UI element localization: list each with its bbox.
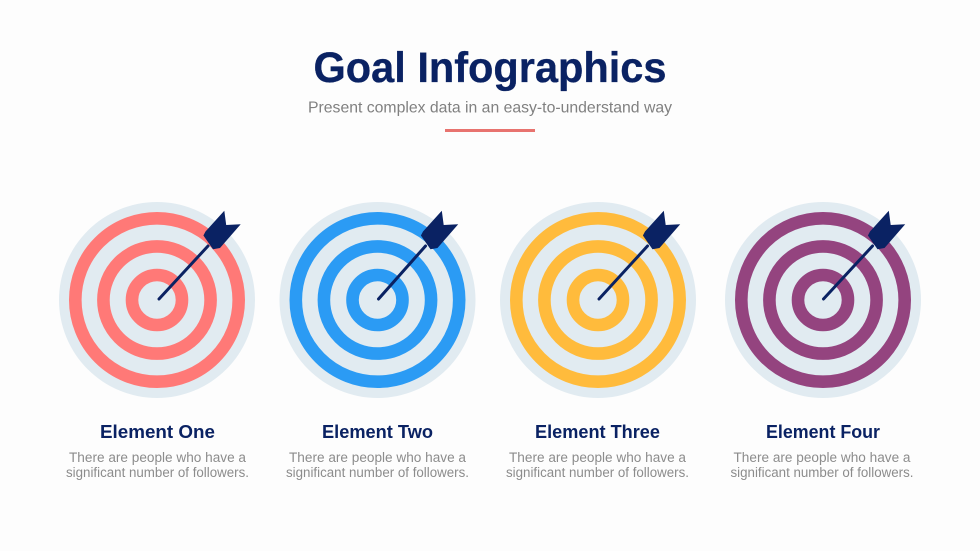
title underline accent <box>445 129 535 132</box>
description: element one <box>66 450 249 480</box>
description: element two: significant number of followers. <box>286 465 469 480</box>
icon: yellow target with dart <box>500 202 696 398</box>
description: element one: significant number of followers. <box>66 465 249 480</box>
heading: element four: Element Four <box>766 421 880 442</box>
description: element four <box>730 450 914 480</box>
description: element four: significant number of followers. <box>730 465 914 480</box>
description: element three <box>506 450 689 480</box>
title: Goal Infographics <box>314 44 666 92</box>
description: element three: There are people who have a <box>509 450 686 465</box>
icon: blue target with dart <box>280 202 476 398</box>
panel: element three <box>500 202 696 480</box>
subtitle: Present complex data in an easy-to-understand way <box>308 100 672 116</box>
description: element one: There are people who have a <box>69 450 246 465</box>
icon: purple target with dart <box>725 202 921 398</box>
heading: element three: Element Three <box>535 421 660 442</box>
panel: element one <box>59 202 255 480</box>
description: element two: There are people who have a <box>289 450 466 465</box>
description: element four: There are people who have a <box>734 450 911 465</box>
panel: element four <box>725 202 921 480</box>
heading: element one: Element One <box>100 421 215 442</box>
description: element two <box>286 450 469 480</box>
icon: coral target with dart <box>59 202 255 398</box>
heading: element two: Element Two <box>322 421 433 442</box>
description: element three: significant number of followers. <box>506 465 689 480</box>
panel: element two <box>280 202 476 480</box>
